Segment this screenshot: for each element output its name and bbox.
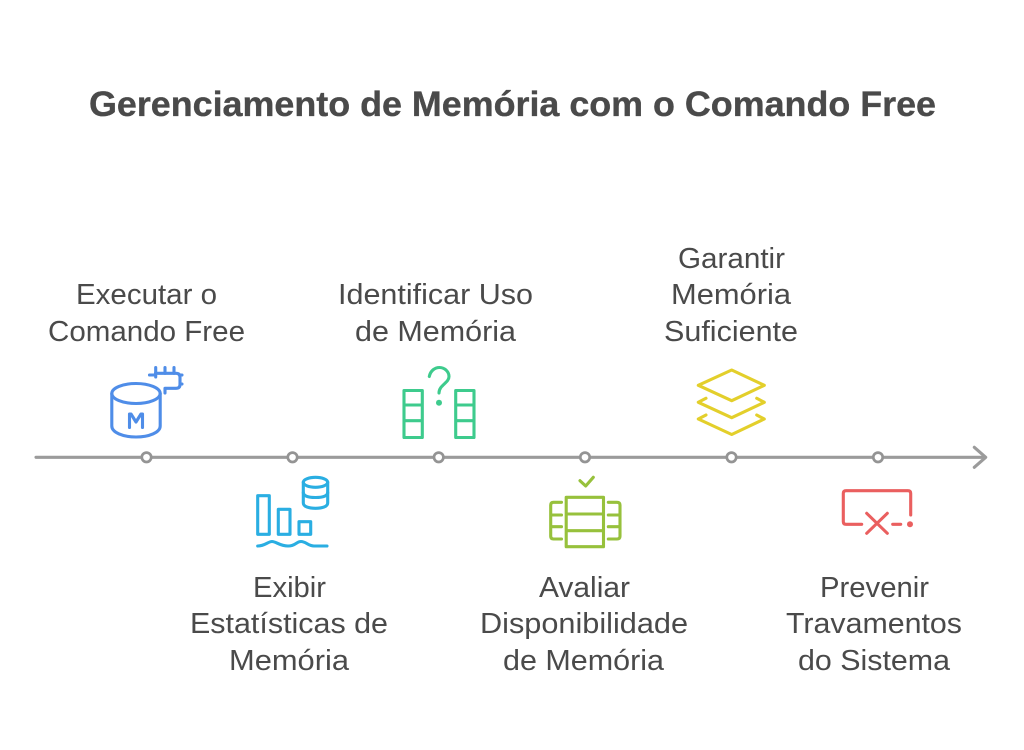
step 5 label [664, 243, 798, 348]
step 5: Garantir Memória Suficiente [664, 243, 798, 434]
step 5 label: Suficiente [664, 316, 798, 348]
step 4 label: Avaliar [539, 572, 631, 604]
icon: columns with question mark [404, 368, 474, 438]
step 3: Identificar Uso de Memória [338, 279, 533, 438]
step 6: Prevenir Travamentos do Sistema [786, 491, 962, 677]
step 2: Exibir Estatísticas de Memória [190, 477, 388, 677]
step 4 label: de Memória [503, 645, 664, 677]
step 4 label [480, 572, 688, 677]
icon: broken window with x [843, 491, 913, 533]
step 4 label: Disponibilidade [480, 608, 688, 640]
step 2 label [190, 572, 388, 677]
icon: bars with database and water [258, 477, 328, 546]
step 6 label: Travamentos [786, 608, 962, 640]
step 6 label [786, 572, 962, 677]
icon: memory table with check [551, 477, 620, 547]
step 2 label: Memória [229, 645, 349, 677]
icon: memory cylinder with chip [112, 368, 182, 437]
icon: stacked layers [698, 370, 764, 434]
step 3 label: de Memória [355, 316, 516, 348]
step 3 label [338, 279, 533, 348]
step 2 label: Exibir [253, 572, 327, 604]
step 1 label: Comando Free [48, 316, 245, 348]
title: Gerenciamento de Memória com o Comando Free [89, 85, 936, 124]
step 2 label: Estatísticas de [190, 608, 388, 640]
step 6 label: Prevenir [820, 572, 930, 604]
step 3 label: Identificar Uso [338, 279, 533, 311]
step 1 label [48, 279, 245, 348]
step 6 label: do Sistema [798, 645, 950, 677]
step 1 label: Executar o [76, 279, 217, 311]
step 4: Avaliar Disponibilidade de Memória [480, 477, 688, 677]
step 5 label: Garantir [678, 243, 786, 275]
step 1: Executar o Comando Free [48, 279, 245, 437]
step 5 label: Memória [671, 279, 791, 311]
timeline nodes [142, 453, 883, 462]
timeline arrow [36, 447, 986, 467]
